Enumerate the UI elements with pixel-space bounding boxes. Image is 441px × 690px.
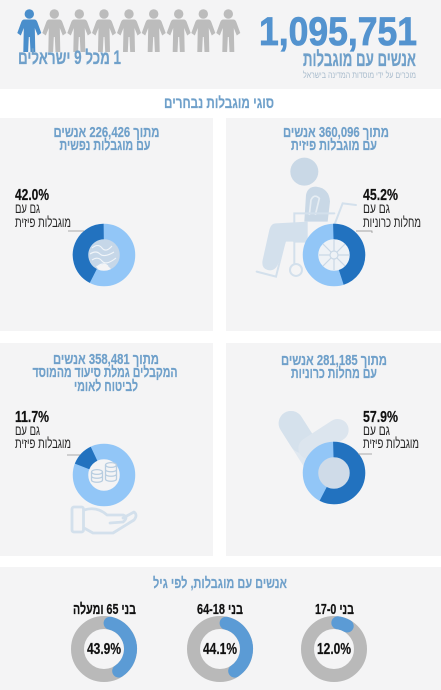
age group: 18-64: בני 64-18 xyxy=(197,601,243,618)
panel: mental disability xyxy=(0,118,213,331)
callout: 42.0% xyxy=(15,187,71,230)
age group: 0-17: בני 17-0 xyxy=(315,601,354,618)
panel title: מתוך 226,426 אנשים xyxy=(54,124,160,141)
panel title: המקבלים גמלת סיעוד מהמוסד xyxy=(32,364,178,381)
icon: open hand xyxy=(72,507,136,533)
icon: wheelchair xyxy=(257,158,356,277)
callout: 42.0%: גם עם xyxy=(15,200,40,216)
leader line xyxy=(358,453,372,455)
callout: 45.2% xyxy=(363,187,421,230)
age group: 0-17: 12.0% xyxy=(317,641,351,658)
panel title xyxy=(283,124,389,154)
panel: national insurance benefit xyxy=(0,343,213,556)
panel title xyxy=(54,124,160,154)
heading: selected disability types: סוגי מוגבלות נבחרים xyxy=(164,95,274,112)
callout: 42.0%: מוגבלות פיזית xyxy=(15,214,71,230)
callout: 42.0%: 42.0% xyxy=(15,187,49,204)
panel title: מתוך 358,481 אנשים xyxy=(53,351,159,368)
callout: 11.7%: מוגבלות פיזית xyxy=(15,435,71,451)
panel title: עם מוגבלות פיזית xyxy=(291,137,377,154)
panel title: מתוך 360,096 אנשים xyxy=(283,124,389,141)
caption: 1 of 9 Israelis: 1 מכל 9 ישראלים xyxy=(18,48,121,69)
panel title: עם מחלות כרוניות xyxy=(291,365,377,382)
panel title xyxy=(281,352,387,382)
panel title xyxy=(32,351,178,395)
panel title: מתוך 281,185 אנשים xyxy=(281,352,387,369)
age group: 18-64: 44.1% xyxy=(203,641,237,658)
heading: by age: אנשים עם מוגבלות, לפי גיל xyxy=(153,575,287,592)
icon: coins xyxy=(92,463,116,482)
icon row: 1 of 9 people xyxy=(17,9,240,52)
age group: 65+: 43.9% xyxy=(87,641,121,658)
callout: 45.2%: 45.2% xyxy=(363,187,398,204)
panel: chronic illness xyxy=(226,343,441,556)
age group: 18-64 xyxy=(188,601,252,681)
donut with coins icon xyxy=(73,444,135,506)
callout: 57.9% xyxy=(363,409,419,451)
panel title: לביטוח לאומי xyxy=(74,378,138,395)
leader line xyxy=(67,454,80,456)
callout: 57.9%: גם עם xyxy=(363,422,390,438)
callout: 11.7% xyxy=(15,409,71,451)
callout: 57.9%: 57.9% xyxy=(363,409,398,426)
donut: 57.9% xyxy=(310,450,358,496)
age group: 65+ xyxy=(72,601,136,681)
icon: pills xyxy=(291,423,338,473)
donut: 45.2% xyxy=(310,232,358,278)
leader line xyxy=(68,230,84,232)
big number: 1,095,751 xyxy=(259,10,417,54)
panel: physical disability xyxy=(226,118,441,331)
callout: 45.2%: גם עם xyxy=(363,200,390,216)
donut with brain icon xyxy=(72,223,136,287)
panel title: עם מוגבלות נפשית xyxy=(60,137,150,154)
callout: 11.7%: 11.7% xyxy=(15,409,49,426)
panel: by age xyxy=(0,567,441,690)
leader line xyxy=(356,231,372,233)
age group: 0-17 xyxy=(303,601,365,680)
callout: 11.7%: גם עם xyxy=(15,422,40,438)
age group: 65+: בני 65 ומעלה xyxy=(73,601,136,618)
panel: header band xyxy=(0,0,441,89)
